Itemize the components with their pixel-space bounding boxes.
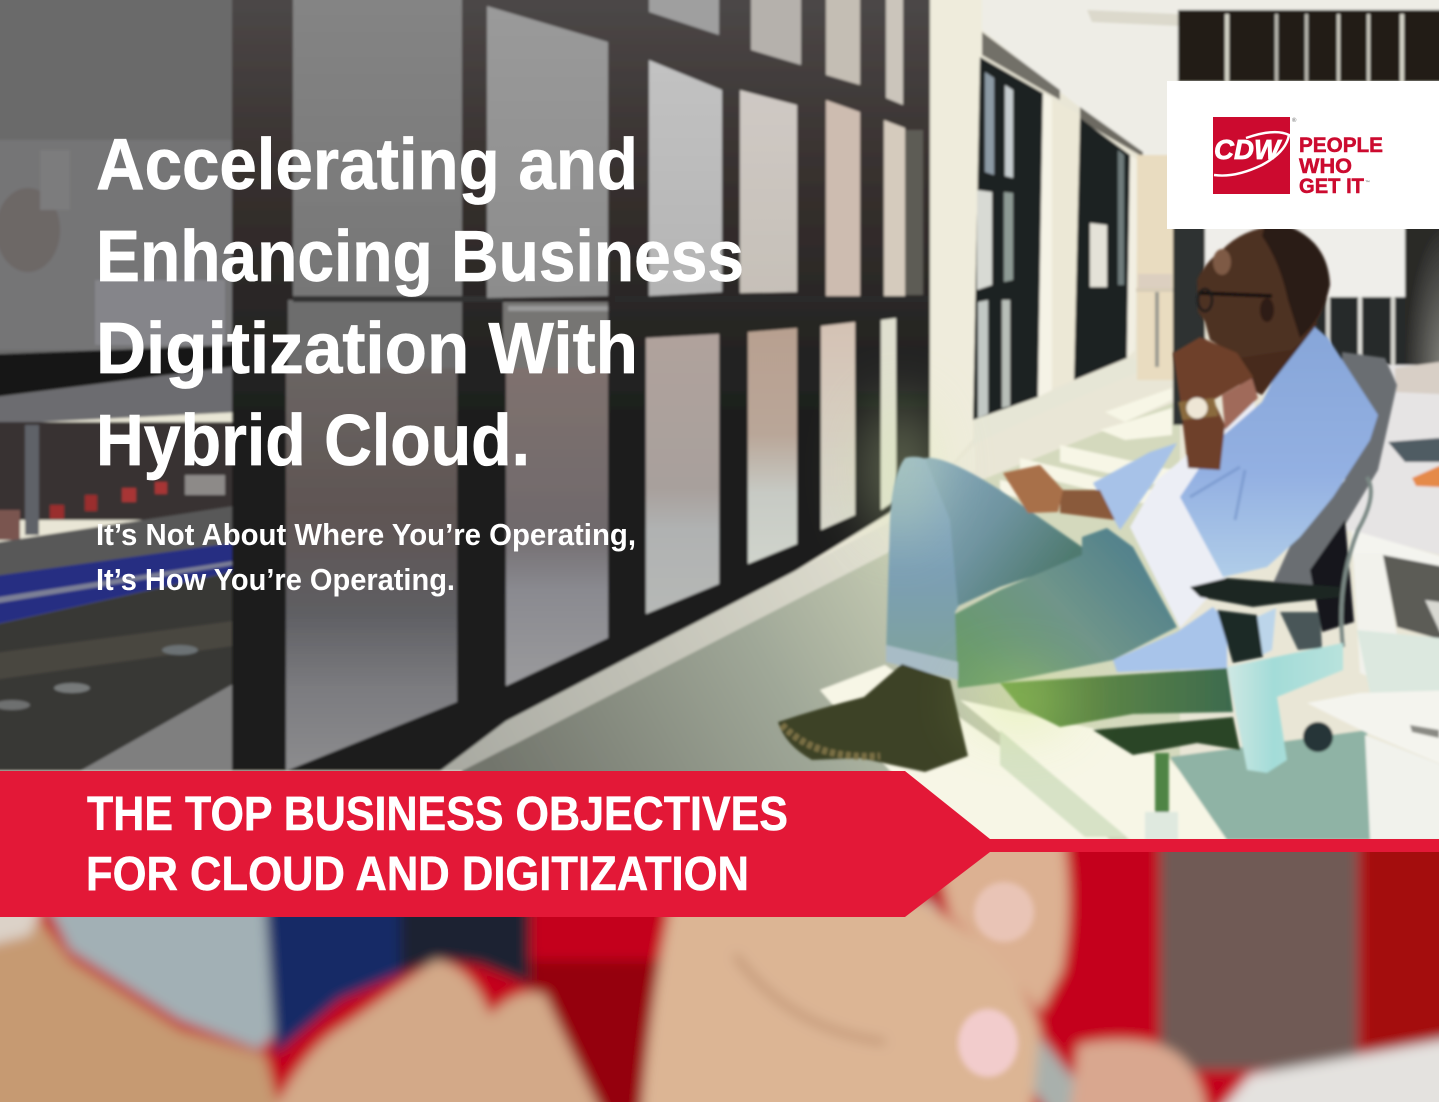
chair post and base: [1093, 717, 1240, 840]
title: Digitization With: [96, 309, 638, 389]
title: [96, 125, 744, 481]
pale green floor band: [1000, 730, 1127, 837]
back wall and side table: [1136, 155, 1177, 380]
dark red shadow: [530, 960, 660, 1102]
logo tagline: PEOPLE: [1299, 134, 1383, 157]
dark red right panel: [1362, 830, 1439, 1055]
chair frame: [1341, 477, 1371, 647]
ceiling: [982, 0, 1439, 160]
subtitle: It’s How You’re Operating.: [96, 562, 455, 597]
sunlight stripes on floor: [820, 388, 1240, 840]
title: Hybrid Cloud.: [96, 401, 530, 481]
white t-shirt: [1130, 395, 1262, 628]
raised forearm and hand at chin: [1173, 337, 1253, 470]
grey-blue shirt patch: [45, 900, 285, 1050]
fingers: [265, 960, 610, 1102]
title: Enhancing Business: [96, 217, 744, 297]
black patch: [400, 900, 530, 985]
main hand: [640, 900, 1040, 1102]
white pillar: [930, 0, 982, 490]
far windows: [973, 32, 1143, 445]
dark window frames: [232, 0, 930, 771]
head: [1197, 225, 1330, 358]
red banner: [0, 771, 990, 917]
chair back: [1270, 352, 1397, 650]
subtitle: It’s Not About Where You’re Operating,: [96, 517, 636, 552]
logo mark: CDW: [1214, 134, 1283, 165]
top fingernail: [974, 882, 1034, 942]
fingernails: [958, 882, 1034, 1077]
logo tagline: WHO: [1299, 155, 1352, 178]
logo tagline: [1299, 134, 1383, 198]
forearm and hand on knee: [1003, 465, 1115, 520]
pen: [920, 894, 1081, 1102]
lens flare glow: [865, 400, 1070, 728]
pale cuff: [0, 917, 49, 951]
red strip right of banner: [985, 839, 1439, 852]
window panes: [286, 0, 935, 771]
upper thigh jeans: [925, 458, 1082, 606]
title: Accelerating and: [96, 125, 638, 205]
banner heading: [86, 788, 788, 901]
armrest: [1190, 578, 1340, 663]
navy shirt patch: [265, 900, 400, 1055]
blurred hand shapes: [0, 830, 1439, 1102]
photo base: [0, 0, 1439, 860]
neck: [1225, 318, 1318, 395]
left wrist: [0, 900, 285, 1102]
lower thigh jeans: [955, 528, 1177, 688]
chair arm support: [1227, 643, 1343, 773]
banner heading: THE TOP BUSINESS OBJECTIVES: [87, 788, 788, 841]
man seated in office chair: [778, 225, 1397, 840]
floor and sill under window: [440, 400, 1180, 840]
right desks and floor: [1170, 362, 1439, 840]
white paper corner: [1205, 1035, 1439, 1102]
lower fingers: [1068, 1040, 1208, 1102]
blurred hands photo: [0, 830, 1439, 1102]
trademark: ™: [1365, 180, 1370, 186]
banner heading: FOR CLOUD AND DIGITIZATION: [86, 848, 749, 901]
subtitle: [96, 517, 636, 597]
raised shin jeans: [886, 457, 962, 668]
palm crease: [735, 955, 885, 1042]
blinds and whiteboard: [1173, 10, 1439, 425]
jeans cuff: [886, 645, 958, 680]
brown jacket panel: [1160, 830, 1358, 1070]
thumb: [930, 830, 1068, 1012]
red jacket background: [31, 852, 1372, 1102]
lower fingernail: [958, 1009, 1018, 1077]
chest skin: [1222, 378, 1258, 430]
watch: [1178, 398, 1218, 420]
outside street scene through left window: [0, 0, 240, 771]
logo tagline: GET IT: [1299, 175, 1364, 198]
boot: [778, 664, 968, 772]
office photo background: [0, 0, 1439, 860]
registered mark: ®: [1292, 117, 1297, 124]
logo mark: [1213, 117, 1290, 194]
logo box: [1167, 81, 1439, 229]
chair seat: [1000, 668, 1233, 727]
shirt body and sleeves: [1093, 318, 1378, 672]
